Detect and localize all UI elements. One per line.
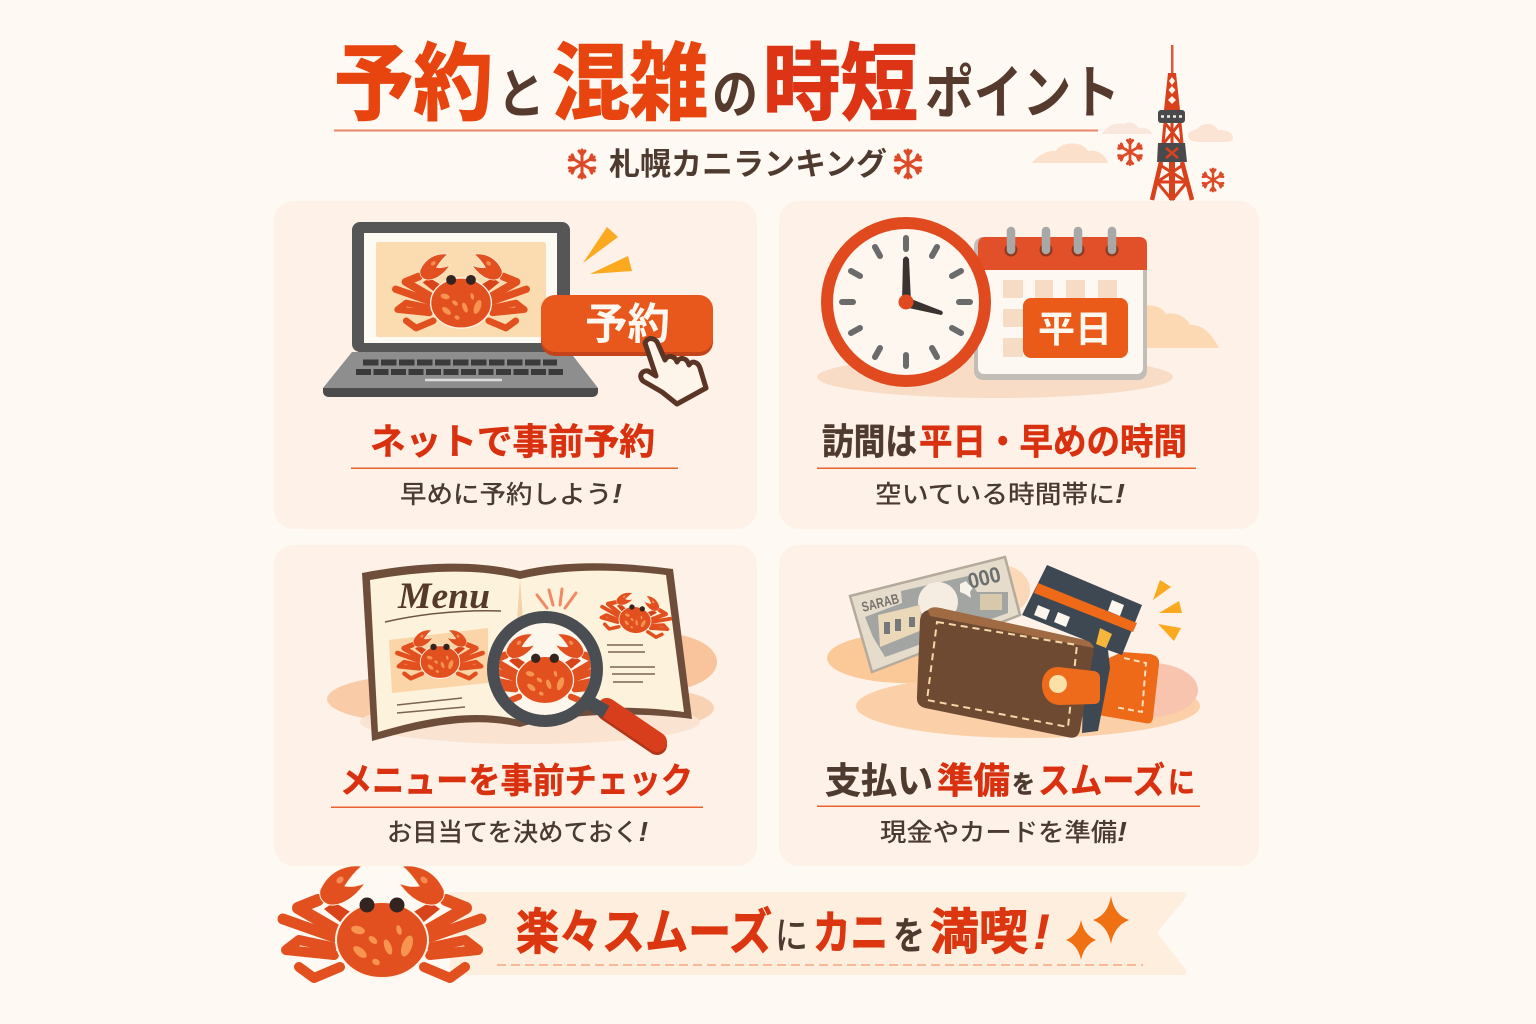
icon: calendar: 平日	[1038, 309, 1112, 350]
subtitle text: 札幌カニランキング	[609, 147, 887, 182]
banner message: に	[775, 916, 808, 958]
clouds behind tower	[1032, 122, 1233, 163]
icon: magnifying glass	[484, 617, 657, 745]
reservation button	[541, 295, 713, 356]
icon: banknote	[850, 557, 1020, 672]
icon: brown wallet	[917, 607, 1100, 738]
icon: laptop with crab	[323, 222, 598, 397]
title	[334, 37, 1120, 131]
panel: online reservation	[274, 201, 757, 529]
title underline	[334, 130, 1098, 132]
panel heading: 訪間は	[822, 421, 917, 462]
dashed line	[497, 964, 1143, 966]
icon: right snowflake	[894, 150, 922, 178]
icon: left snowflake	[568, 150, 596, 178]
panel heading: 準備	[937, 760, 1010, 801]
heading underline	[817, 806, 1200, 807]
icon: banknote: 000	[965, 562, 1003, 594]
ground shadow	[817, 356, 1173, 398]
heading underline	[817, 468, 1196, 469]
panel background	[274, 545, 757, 866]
banner message	[516, 904, 1050, 960]
background blobs	[327, 633, 717, 744]
panel heading	[825, 760, 1195, 801]
banner message: を	[893, 916, 925, 958]
icon: sparkles	[1066, 896, 1129, 960]
menu title: Menu	[397, 576, 490, 617]
subtitle	[568, 147, 922, 182]
title: と	[497, 65, 545, 125]
banner message: !	[1033, 904, 1050, 960]
ribbon	[450, 892, 1186, 975]
panel heading: 支払い	[825, 760, 933, 801]
panel heading: スムーズ	[1038, 760, 1165, 801]
title: ポイント	[925, 61, 1120, 126]
panel: weekday visit	[779, 201, 1259, 529]
panel caption: 空いている時間帯に !	[875, 478, 1125, 509]
panel heading	[822, 421, 1187, 462]
icon: clock	[821, 217, 991, 387]
title: の	[712, 65, 758, 125]
panel background	[779, 201, 1259, 529]
panel: payment	[779, 545, 1259, 866]
panel caption: お目当てを決めておく!	[387, 816, 648, 847]
icon: large crab	[283, 866, 481, 978]
icon: orange card wallet	[1098, 652, 1159, 723]
panel: menu check	[274, 545, 757, 866]
panel heading: を	[1012, 771, 1035, 799]
panel background	[779, 545, 1259, 866]
panel caption: 現金やカードを準備 !	[880, 816, 1127, 847]
panel caption: 早めに予約しよう !	[400, 478, 622, 509]
panel heading: に	[1168, 767, 1195, 800]
reservation button: 予約	[585, 301, 670, 349]
icon: dark credit card	[1022, 565, 1142, 733]
heading underline	[331, 806, 703, 808]
background blobs	[827, 565, 1200, 738]
icon: yellow emphasis rays	[583, 227, 632, 274]
panel heading: 平日・早めの時間	[919, 421, 1187, 462]
panel background	[274, 201, 757, 529]
banner message: 楽々スムーズ	[516, 906, 772, 960]
title: 混雑	[552, 37, 708, 131]
panel heading: メニューを事前チェック	[340, 762, 693, 801]
icon: pointing hand	[641, 339, 706, 404]
icon: open menu book	[362, 563, 692, 741]
icon: snowflake by tower right	[1202, 169, 1224, 191]
heading underline	[351, 468, 678, 469]
icon: banknote: SARAB	[860, 590, 901, 615]
banner message: 満喫	[930, 906, 1028, 960]
icon: calendar	[974, 231, 1147, 380]
icon: yellow emphasis rays	[1153, 580, 1182, 641]
bottom banner	[283, 866, 1186, 978]
icon: Sapporo TV tower	[1152, 45, 1192, 200]
title: 時短	[763, 37, 918, 131]
cloud behind calendar	[1140, 305, 1219, 348]
panel heading: ネットで事前予約	[370, 421, 655, 462]
icon: snowflake by tower left	[1118, 139, 1142, 165]
title: 予約	[334, 37, 493, 131]
banner message: カニ	[813, 907, 888, 959]
